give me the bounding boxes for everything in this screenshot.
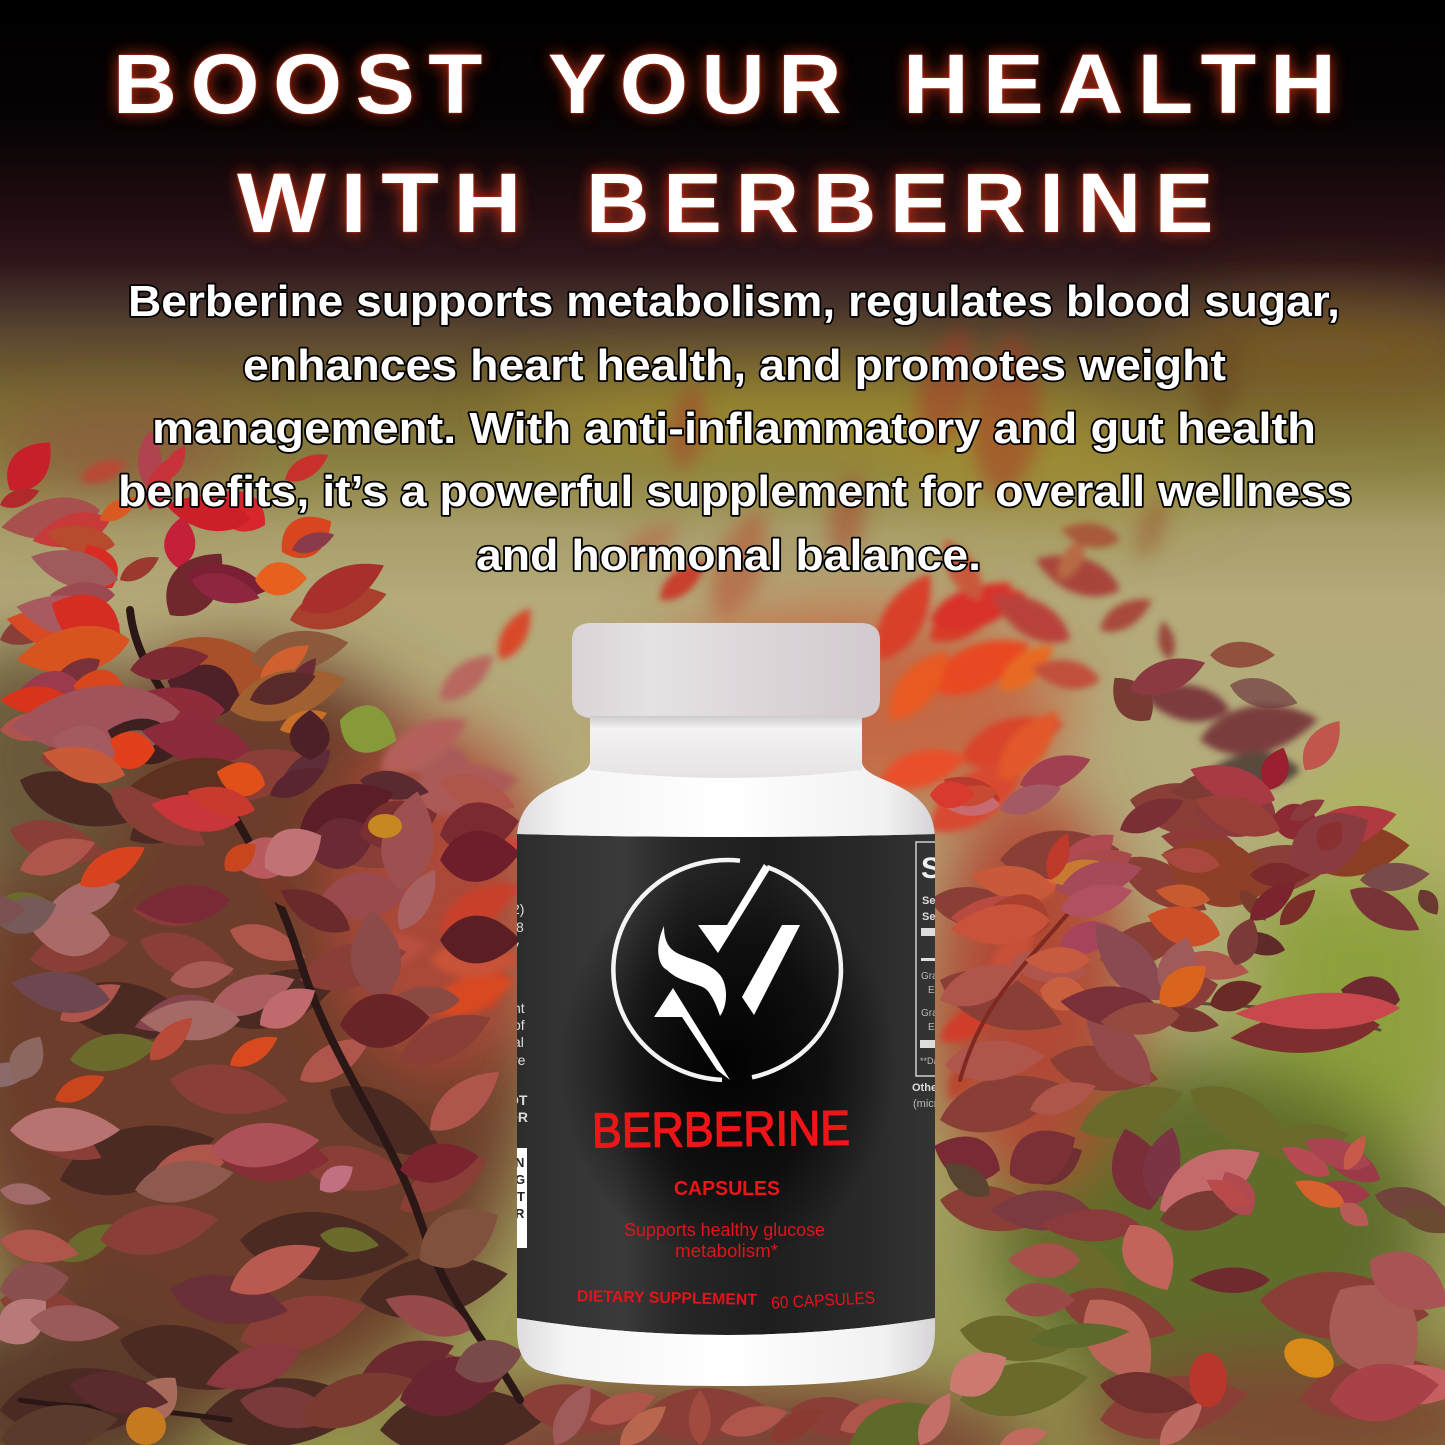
supplement facts panel: Gra (921, 1008, 938, 1019)
supplement facts panel: Ser (922, 911, 940, 923)
intro paragraph: benefits, it’s a powerful supplement for overall wellness (118, 467, 1352, 516)
intro paragraph: and hormonal balance. (476, 531, 981, 580)
intro paragraph (118, 277, 1352, 580)
supplement facts panel: Other (912, 1082, 942, 1094)
white warning box: T (517, 1189, 525, 1204)
title: Boost your health with berberine: HEALTH (903, 37, 1350, 131)
title: Boost your health with berberine: WITH (237, 156, 536, 250)
left side label text fragments: nt (513, 1000, 525, 1016)
left side label text fragments: al (513, 1034, 524, 1050)
intro paragraph: Berberine supports metabolism, regulates blood sugar, (128, 277, 1340, 326)
bottle label (507, 834, 942, 1335)
intro paragraph: enhances heart health, and promotes weight (243, 341, 1226, 390)
left side label text fragments: of (513, 1017, 525, 1033)
supplement facts panel: Gra (921, 971, 938, 982)
left side label text fragments (517, 904, 528, 1122)
product name: BERBERINE (592, 1102, 850, 1158)
left side label text fragments: OT (508, 1092, 528, 1108)
capsules subtitle: CAPSULES (674, 1178, 780, 1200)
supplement facts panel: (micr (913, 1098, 938, 1110)
capsule count: 60 CAPSULES (771, 1288, 876, 1313)
brand logo (613, 860, 841, 1080)
supplement facts panel (912, 841, 935, 1110)
left side label text fragments: OR (507, 1109, 528, 1125)
supplement facts panel: S (921, 852, 941, 885)
supplement facts panel: **Da (920, 1056, 939, 1066)
left side label text fragments: 2) (512, 901, 524, 917)
supplement line: DIETARY SUPPLEMENT (577, 1288, 757, 1309)
supplement facts panel: Ex (928, 1022, 940, 1033)
bottle neck and shoulder (517, 716, 935, 1386)
supplement facts panel: Ex (928, 985, 940, 996)
white warning box: R (515, 1206, 525, 1221)
product bottle (507, 623, 942, 1386)
white warning box: G (515, 1172, 525, 1187)
title: Boost your health with berberine: YOUR (548, 37, 855, 131)
benefit tagline: Supports healthy glucose (624, 1220, 825, 1240)
title: Boost your health with berberine: BOOST (113, 37, 496, 131)
left side label text fragments: re (513, 1052, 526, 1068)
benefit tagline (624, 1222, 824, 1257)
white warning box (517, 1148, 527, 1248)
title: Boost your health with berberine: BERBERINE (586, 156, 1227, 250)
title: Boost your health with berberine (113, 37, 1350, 250)
left side label text fragments: y (512, 937, 519, 953)
intro paragraph: management. With anti-inflammatory and gut health (152, 404, 1316, 453)
benefit tagline: metabolism* (675, 1241, 778, 1261)
bottle cap (572, 623, 880, 718)
left side label text fragments: 8 (516, 919, 524, 935)
white warning box: N (515, 1155, 524, 1170)
supplement facts panel: Ser (922, 895, 940, 907)
